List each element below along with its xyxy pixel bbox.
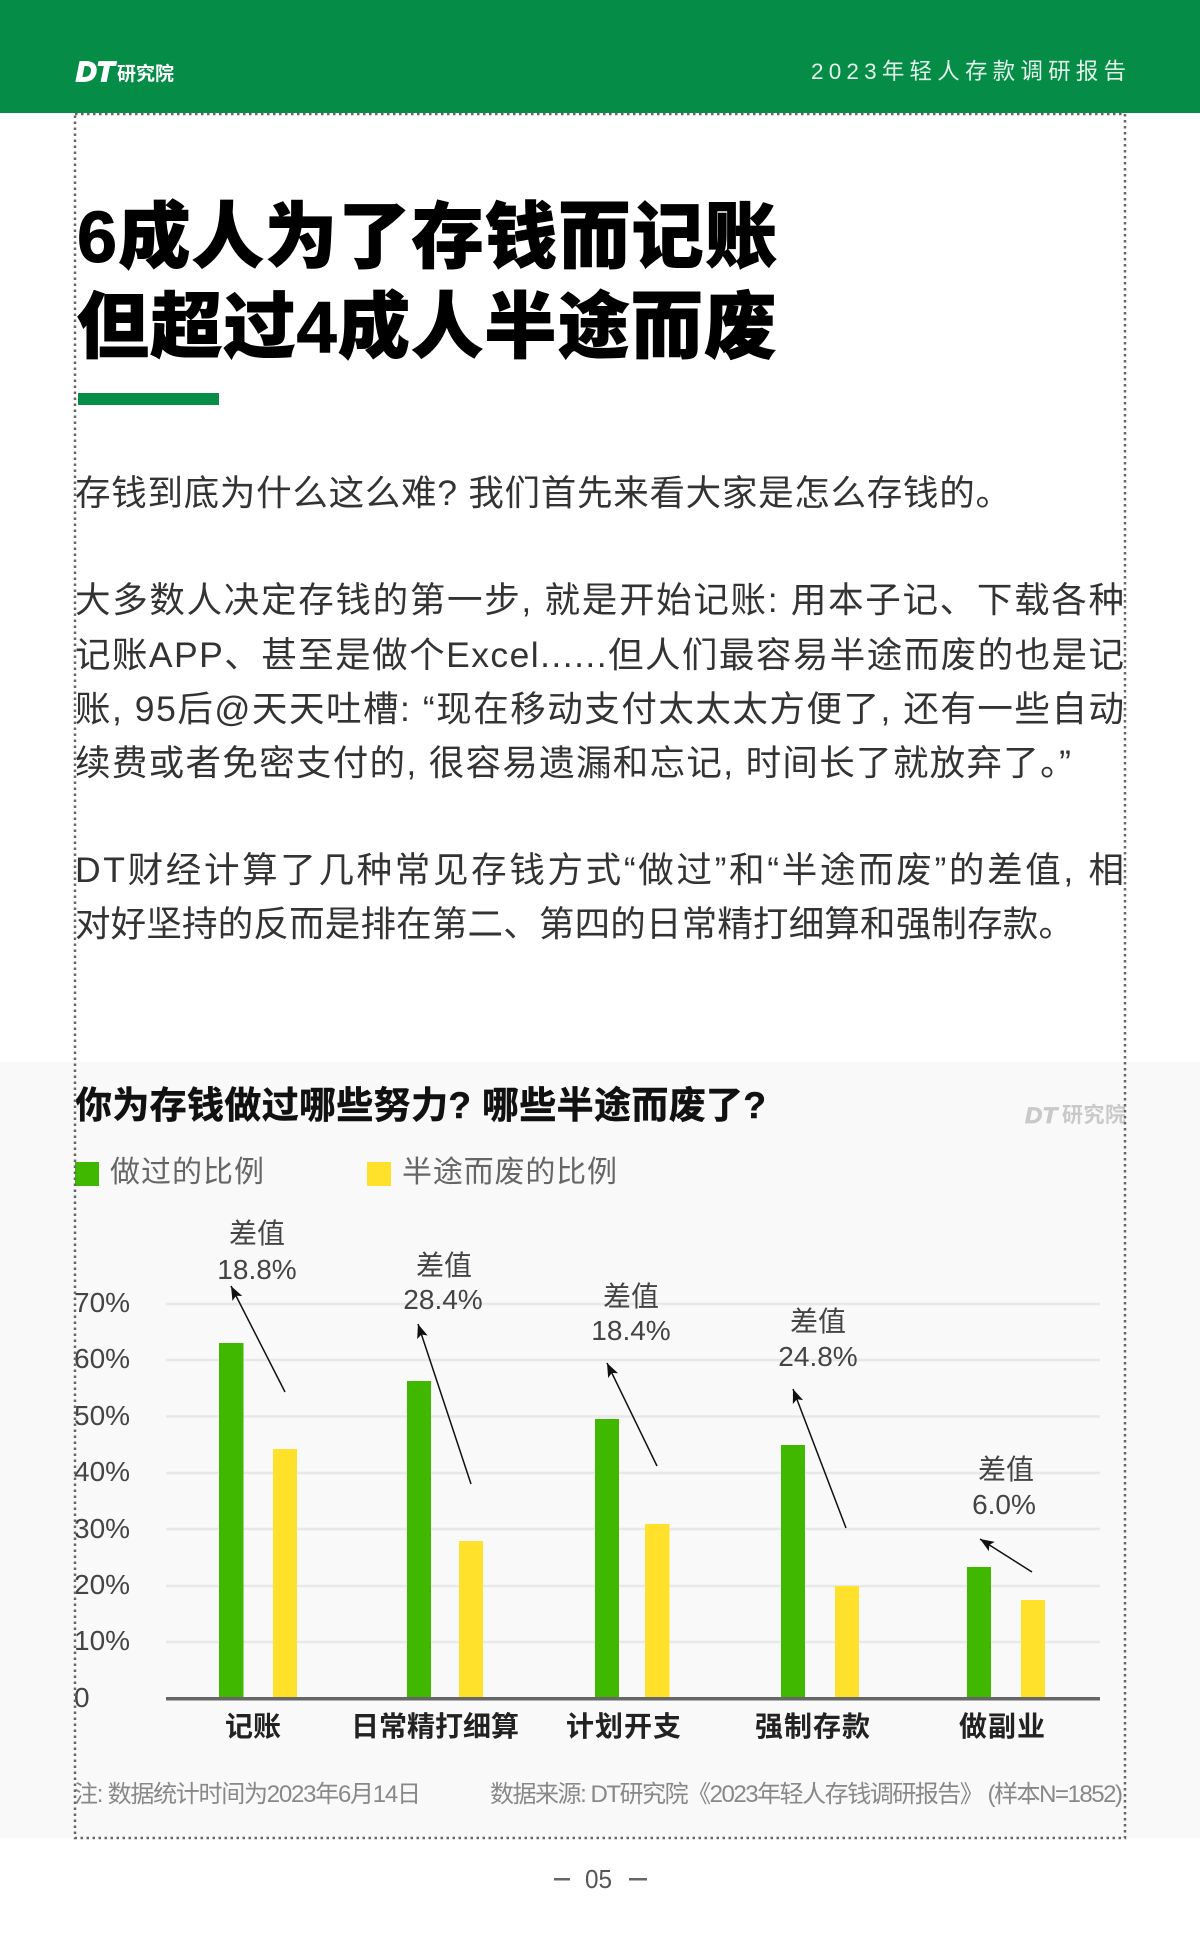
report name: 2023年轻人存款调研报告 [811, 59, 1126, 84]
chart panel [0, 1062, 1200, 1838]
grid lines [166, 1304, 1100, 1642]
logo: DT研究院: DT [76, 56, 117, 87]
body text: DT财经计算了几种常见存钱方式“做过”和“半途而废”的差值, 相 [75, 850, 1124, 890]
y axis labels: 50% [74, 1400, 130, 1431]
footnote: 注: 数据统计时间为2023年6月14日 [74, 1781, 421, 1808]
callout: 18.4%: 差值 [603, 1281, 659, 1312]
category labels: 做副业 [959, 1711, 1045, 1742]
watermark logo [1025, 1103, 1126, 1128]
y axis labels: 40% [74, 1456, 130, 1487]
body text: 续费或者免密支付的, 很容易遗漏和忘记, 时间长了就放弃了。” [75, 743, 1071, 783]
page number: 05 [585, 1864, 612, 1894]
callout: 6.0% [972, 1454, 1036, 1572]
callout: 24.8%: 24.8% [778, 1341, 858, 1372]
y axis labels: 60% [74, 1343, 130, 1374]
page title: 6成人为了存钱而记账 [77, 198, 777, 278]
bars: 日常精打细算 [407, 1381, 483, 1699]
callout: 18.8%: 差值 [229, 1218, 285, 1249]
callout: 28.4%: 差值 [416, 1250, 472, 1281]
body text: 大多数人决定存钱的第一步, 就是开始记账: 用本子记、下载各种 [75, 580, 1124, 620]
logo: DT研究院: 研究院 [117, 62, 174, 85]
category labels [225, 1711, 1045, 1742]
data source: 数据来源: DT研究院《2023年轻人存钱调研报告》 (样本N=1852) [490, 1781, 1123, 1808]
callout: 18.4% [591, 1281, 671, 1466]
callout: 28.4% [403, 1250, 483, 1484]
callout: 24.8% [778, 1306, 858, 1528]
legend: 做过的比例 [110, 1156, 264, 1189]
category labels: 日常精打细算 [351, 1711, 519, 1742]
y axis labels: 70% [74, 1287, 130, 1318]
body text: 对好坚持的反而是排在第二、第四的日常精打细算和强制存款。 [75, 904, 1074, 944]
body text [75, 473, 1124, 944]
body text: 存钱到底为什么这么难? 我们首先来看大家是怎么存钱的。 [75, 473, 1011, 513]
logo: DT研究院 [76, 56, 174, 87]
callout: 18.4%: 18.4% [591, 1315, 671, 1346]
y axis labels: 0 [74, 1682, 90, 1713]
callout: 24.8%: 差值 [790, 1306, 846, 1337]
callout: 28.4%: 28.4% [403, 1284, 483, 1315]
y axis labels: 10% [74, 1625, 130, 1656]
callout: 18.8% [217, 1218, 297, 1392]
page number [554, 1864, 647, 1894]
x axis line [166, 1697, 1100, 1700]
page title [77, 198, 777, 368]
body text: 账, 95后@天天吐槽: “现在移动支付太太太方便了, 还有一些自动 [75, 689, 1124, 729]
y axis labels: 20% [74, 1569, 130, 1600]
category labels: 记账 [225, 1711, 281, 1742]
y axis labels [74, 1287, 130, 1713]
page title: 但超过4成人半途而废 [77, 288, 776, 368]
legend [75, 1156, 617, 1189]
bars: 计划开支 [595, 1419, 670, 1699]
watermark logo: 研究院 [1062, 1103, 1126, 1127]
bars: 做副业 [967, 1567, 1045, 1699]
chart title: 你为存钱做过哪些努力? 哪些半途而废了? [75, 1085, 766, 1126]
legend: 半途而废的比例 [402, 1156, 617, 1189]
watermark logo: DT [1025, 1103, 1059, 1128]
category labels: 计划开支 [566, 1711, 681, 1742]
callout: 6.0%: 6.0% [972, 1489, 1036, 1520]
y axis labels: 30% [74, 1513, 130, 1544]
bars: 强制存款 [781, 1445, 859, 1699]
callout: 6.0%: 差值 [978, 1454, 1034, 1485]
header band [0, 0, 1200, 113]
bars: 记账 [219, 1343, 297, 1699]
category labels: 强制存款 [755, 1711, 870, 1742]
callout: 18.8%: 18.8% [217, 1254, 297, 1285]
body text: 记账APP、甚至是做个Excel......但人们最容易半途而废的也是记 [75, 635, 1124, 675]
title accent bar [78, 393, 219, 405]
